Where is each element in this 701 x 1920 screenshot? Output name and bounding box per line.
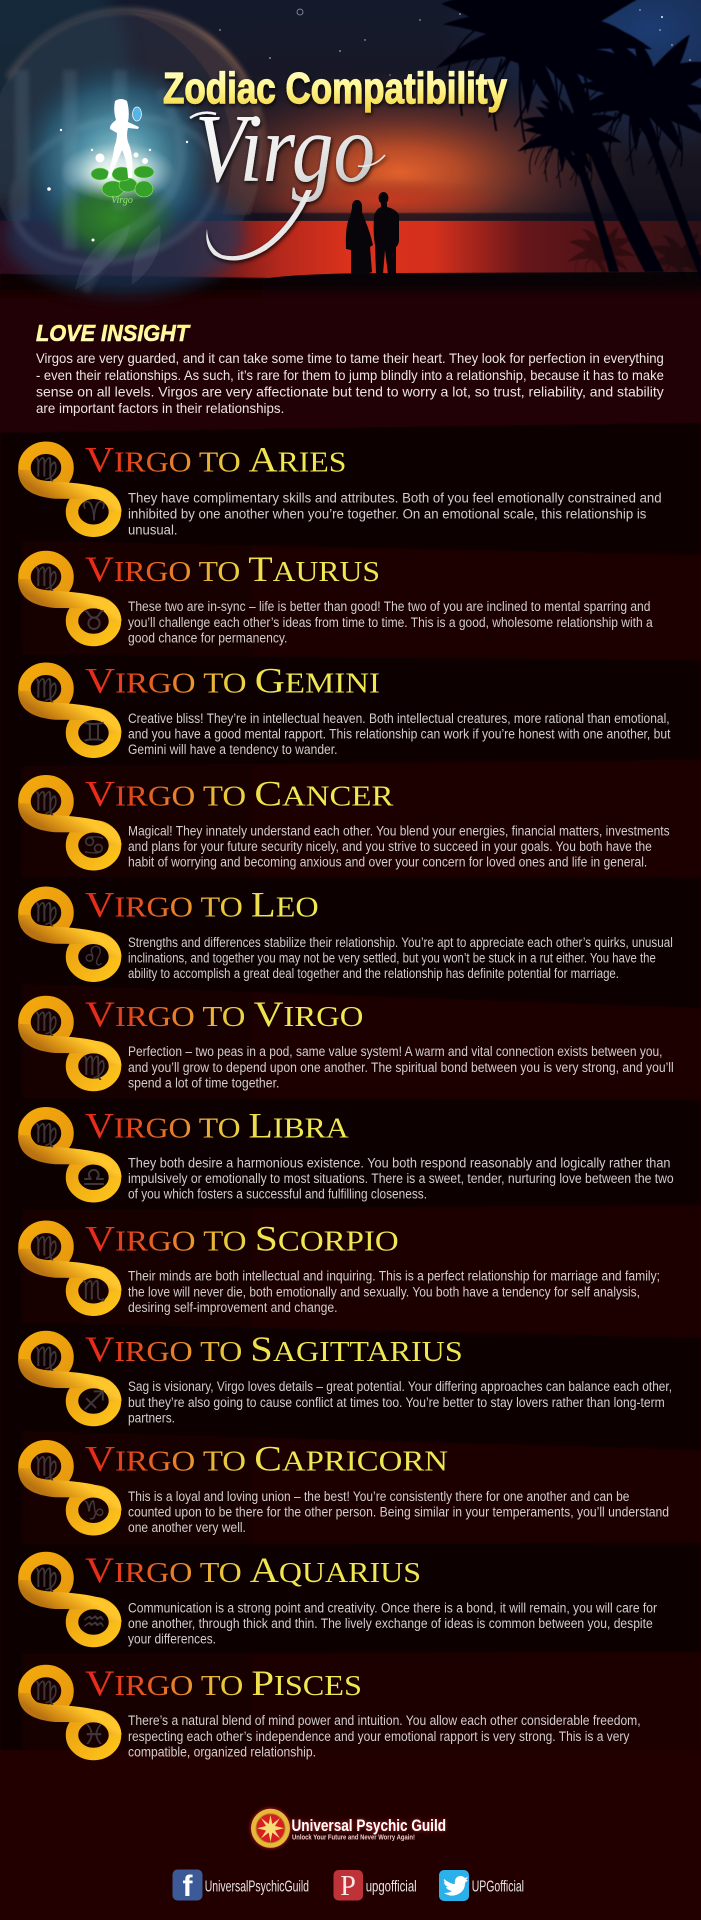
icon: infinity with Virgo and Cancer signs: ♋ bbox=[82, 830, 106, 861]
description: compatible, organized relationship. bbox=[128, 1744, 316, 1759]
description: This is a loyal and loving union – the best! You’re consistently there for one another and can be bbox=[128, 1489, 629, 1504]
icon: infinity with two Virgo signs: ♍ bbox=[34, 1007, 58, 1038]
description bbox=[128, 1156, 674, 1202]
description: you’ll challenge each other’s ideas from time to time. This is a good, wholesome relationship with a bbox=[128, 615, 653, 630]
small script sign label: Virgo bbox=[111, 195, 133, 206]
love insight text: are important factors in their relationships. bbox=[36, 400, 284, 416]
handle: UniversalPsychicGuild bbox=[205, 1878, 309, 1896]
social: Facebook bbox=[172, 1870, 309, 1903]
description: one another, through thick and thin. The lively exchange of ideas is common between you, despite bbox=[128, 1616, 653, 1631]
icon: Pinterest: P bbox=[340, 1871, 356, 1902]
love insight text: sense on all levels. Virgos are very affectionate but tend to worry a lot, so trust, reliability, and stability bbox=[36, 384, 664, 400]
icon: infinity with Virgo and Sagittarius signs: ♍ bbox=[34, 1342, 58, 1373]
glowing orb with ghost Virgo symbol bbox=[0, 58, 245, 295]
icon: infinity with Virgo and Taurus signs: ♍ bbox=[34, 562, 58, 593]
handle: UPGofficial bbox=[472, 1878, 524, 1896]
love insight text: Virgos are very guarded, and it can take some time to tame their heart. They look for perfection in everything bbox=[36, 350, 664, 366]
icon: infinity with Virgo and Scorpio signs: ♏ bbox=[82, 1276, 106, 1307]
icon: infinity with Virgo and Sagittarius signs: ♐ bbox=[82, 1386, 106, 1417]
row: Virgo to Libra bbox=[18, 1105, 674, 1202]
icon: infinity with Virgo and Cancer signs bbox=[18, 781, 122, 864]
description: and plans for your future security nicely, and you strive to succeed in your goals. You both have the bbox=[128, 839, 652, 854]
love insight heading: LOVE INSIGHT bbox=[36, 320, 191, 346]
description: ability to accomplish a great deal together and the relationship has definite potential for marriage. bbox=[128, 966, 619, 981]
icon: infinity with Virgo and Aries signs: ♍ bbox=[34, 453, 58, 484]
love insight text: - even their relationships. As such, it’s rare for them to jump blindly into a relationship, because it has to make bbox=[36, 367, 664, 383]
icon: infinity with Virgo and Leo signs: ♌ bbox=[82, 942, 106, 973]
description: your differences. bbox=[128, 1632, 216, 1647]
description: unusual. bbox=[128, 523, 178, 538]
heading: VIRGO TO CANCER bbox=[85, 773, 393, 813]
row: Virgo to Aquarius bbox=[18, 1550, 657, 1647]
icon: infinity with Virgo and Taurus signs: ♉ bbox=[82, 606, 106, 637]
row: Virgo to Leo bbox=[18, 885, 673, 981]
handle: upgofficial bbox=[366, 1878, 417, 1896]
description bbox=[128, 824, 670, 870]
heading: VIRGO TO SAGITTARIUS bbox=[85, 1329, 463, 1369]
description bbox=[128, 1489, 669, 1535]
social: Twitter bbox=[439, 1870, 524, 1901]
icon: infinity with Virgo and Aries signs bbox=[18, 448, 122, 531]
night sky bbox=[0, 0, 701, 222]
clover flower bbox=[91, 166, 154, 197]
description bbox=[128, 1713, 641, 1759]
title: Virgo script: Virgo bbox=[195, 95, 375, 203]
woman silhouette with mirror bbox=[107, 99, 142, 178]
palm trees bbox=[416, 0, 701, 292]
row bands background bbox=[0, 423, 701, 1920]
icon: infinity with Virgo and Cancer signs: ♍ bbox=[34, 786, 58, 817]
planet bbox=[0, 10, 263, 287]
icon: infinity with Virgo and Sagittarius signs bbox=[18, 1337, 122, 1420]
icon: infinity with Virgo and Capricorn signs bbox=[18, 1446, 122, 1529]
logo: Universal Psychic Guild bbox=[251, 1809, 446, 1848]
icon: infinity with Virgo and Leo signs: ♍ bbox=[34, 898, 58, 929]
description bbox=[128, 1379, 672, 1425]
icon: infinity with Virgo and Pisces signs: ♓ bbox=[82, 1720, 106, 1751]
icon: infinity with Virgo and Pisces signs: ♍ bbox=[34, 1676, 58, 1707]
icon: infinity with Virgo and Leo signs bbox=[18, 893, 122, 976]
icon: infinity with Virgo and Taurus signs bbox=[18, 557, 122, 640]
description: There’s a natural blend of mind power and intuition. You allow each other considerable freedom, bbox=[128, 1713, 641, 1728]
heading: VIRGO TO GEMINI bbox=[85, 661, 380, 701]
description bbox=[128, 1600, 657, 1647]
icon: infinity with Virgo and Aquarius signs bbox=[18, 1558, 122, 1641]
heading: VIRGO TO PISCES bbox=[85, 1663, 362, 1703]
description bbox=[128, 599, 653, 645]
icon: infinity with Virgo and Scorpio signs: ♍ bbox=[34, 1232, 58, 1263]
icon: infinity with Virgo and Libra signs bbox=[18, 1113, 122, 1196]
description: partners. bbox=[128, 1410, 175, 1425]
icon: infinity with Virgo and Pisces signs bbox=[18, 1671, 122, 1754]
icon: infinity with Virgo and Gemini signs: ♊ bbox=[82, 718, 106, 749]
heading: VIRGO TO AQUARIUS bbox=[85, 1550, 421, 1590]
icon: infinity with Virgo and Aquarius signs: ♍ bbox=[34, 1563, 58, 1594]
description: They both desire a harmonious existence. You both respond reasonably and logically rather than bbox=[128, 1156, 670, 1171]
description: good chance for permanency. bbox=[128, 630, 287, 645]
love insight text bbox=[36, 350, 664, 416]
row: Virgo to Capricorn bbox=[18, 1438, 669, 1535]
row: Virgo to Scorpio bbox=[18, 1219, 660, 1315]
icon: infinity with Virgo and Capricorn signs: ♍ bbox=[34, 1451, 58, 1482]
icon: infinity with Virgo and Capricorn signs: ♑ bbox=[82, 1495, 106, 1526]
sunset glow bbox=[0, 72, 701, 272]
icon: infinity with Virgo and Aries signs: ♈ bbox=[82, 497, 106, 528]
social: Pinterest bbox=[334, 1870, 417, 1902]
description: spend a lot of time together. bbox=[128, 1075, 279, 1090]
heading: VIRGO TO LIBRA bbox=[85, 1105, 349, 1145]
logo emblem bbox=[251, 1809, 290, 1848]
description: inhibited by one another when you’re together. On an emotional scale, this relationship is bbox=[128, 507, 647, 522]
row: Virgo to Cancer bbox=[18, 773, 670, 870]
icon: Facebook: f bbox=[182, 1870, 194, 1903]
icon: infinity with Virgo and Libra signs: ♎ bbox=[82, 1162, 106, 1193]
description: These two are in-sync – life is better than good! The two of you are inclined to mental sparring and bbox=[128, 599, 650, 614]
icon: infinity with two Virgo signs bbox=[18, 1002, 122, 1085]
row: Virgo to Aries bbox=[18, 440, 662, 538]
logo name: Universal Psychic Guild bbox=[292, 1817, 446, 1835]
description bbox=[128, 1269, 660, 1315]
logo tagline: Unlock Your Future and Never Worry Again! bbox=[292, 1834, 415, 1842]
heading: VIRGO TO SCORPIO bbox=[85, 1219, 399, 1259]
icon: infinity with Virgo and Scorpio signs bbox=[18, 1227, 122, 1310]
icon: infinity with Virgo and Aquarius signs: ♒ bbox=[82, 1607, 106, 1638]
row: Virgo to Gemini bbox=[18, 661, 671, 757]
heading: VIRGO TO ARIES bbox=[85, 440, 346, 480]
description bbox=[128, 935, 673, 981]
icon: infinity with Virgo and Libra signs: ♍ bbox=[34, 1118, 58, 1149]
description: desiring self-improvement and change. bbox=[128, 1300, 338, 1315]
title: Zodiac Compatibility: Zodiac Compatibility bbox=[163, 64, 507, 113]
couple silhouette bbox=[346, 192, 399, 275]
title: Virgo script bbox=[190, 95, 385, 260]
description: Gemini will have a tendency to wander. bbox=[128, 742, 338, 757]
row: Virgo to Sagittarius bbox=[18, 1329, 672, 1425]
icon: infinity with Virgo and Gemini signs: ♍ bbox=[34, 674, 58, 705]
description: habit of worrying and becoming anxious and over your concern for loved ones and life in general. bbox=[128, 855, 647, 870]
description bbox=[128, 491, 662, 538]
heading: VIRGO TO VIRGO bbox=[85, 994, 363, 1034]
icon: infinity with Virgo and Gemini signs bbox=[18, 669, 122, 752]
description: of you which fosters a successful and fulfilling closeness. bbox=[128, 1187, 427, 1202]
heading: VIRGO TO TAURUS bbox=[85, 549, 380, 589]
description: They have complimentary skills and attributes. Both of you feel emotionally constrained and bbox=[128, 491, 662, 506]
hero scene bbox=[0, 0, 701, 300]
icon: infinity with two Virgo signs: ♍ bbox=[82, 1051, 106, 1082]
sea bbox=[0, 221, 701, 300]
row: Virgo to Pisces bbox=[18, 1663, 641, 1759]
description: the love will never die, both emotionally and sexually. You both have a tendency for self analysis, bbox=[128, 1284, 640, 1299]
description: one another very well. bbox=[128, 1520, 246, 1535]
row: Virgo to Taurus bbox=[18, 549, 653, 645]
row: Virgo to Virgo bbox=[18, 994, 674, 1090]
description bbox=[128, 711, 671, 757]
heading: VIRGO TO CAPRICORN bbox=[85, 1438, 448, 1478]
beach bbox=[262, 272, 701, 300]
heading: VIRGO TO LEO bbox=[85, 885, 319, 925]
icon: Twitter bbox=[439, 1870, 469, 1901]
description bbox=[128, 1044, 674, 1090]
description: respecting each other’s independence and your emotional rapport is very strong. This is a very bbox=[128, 1729, 630, 1744]
